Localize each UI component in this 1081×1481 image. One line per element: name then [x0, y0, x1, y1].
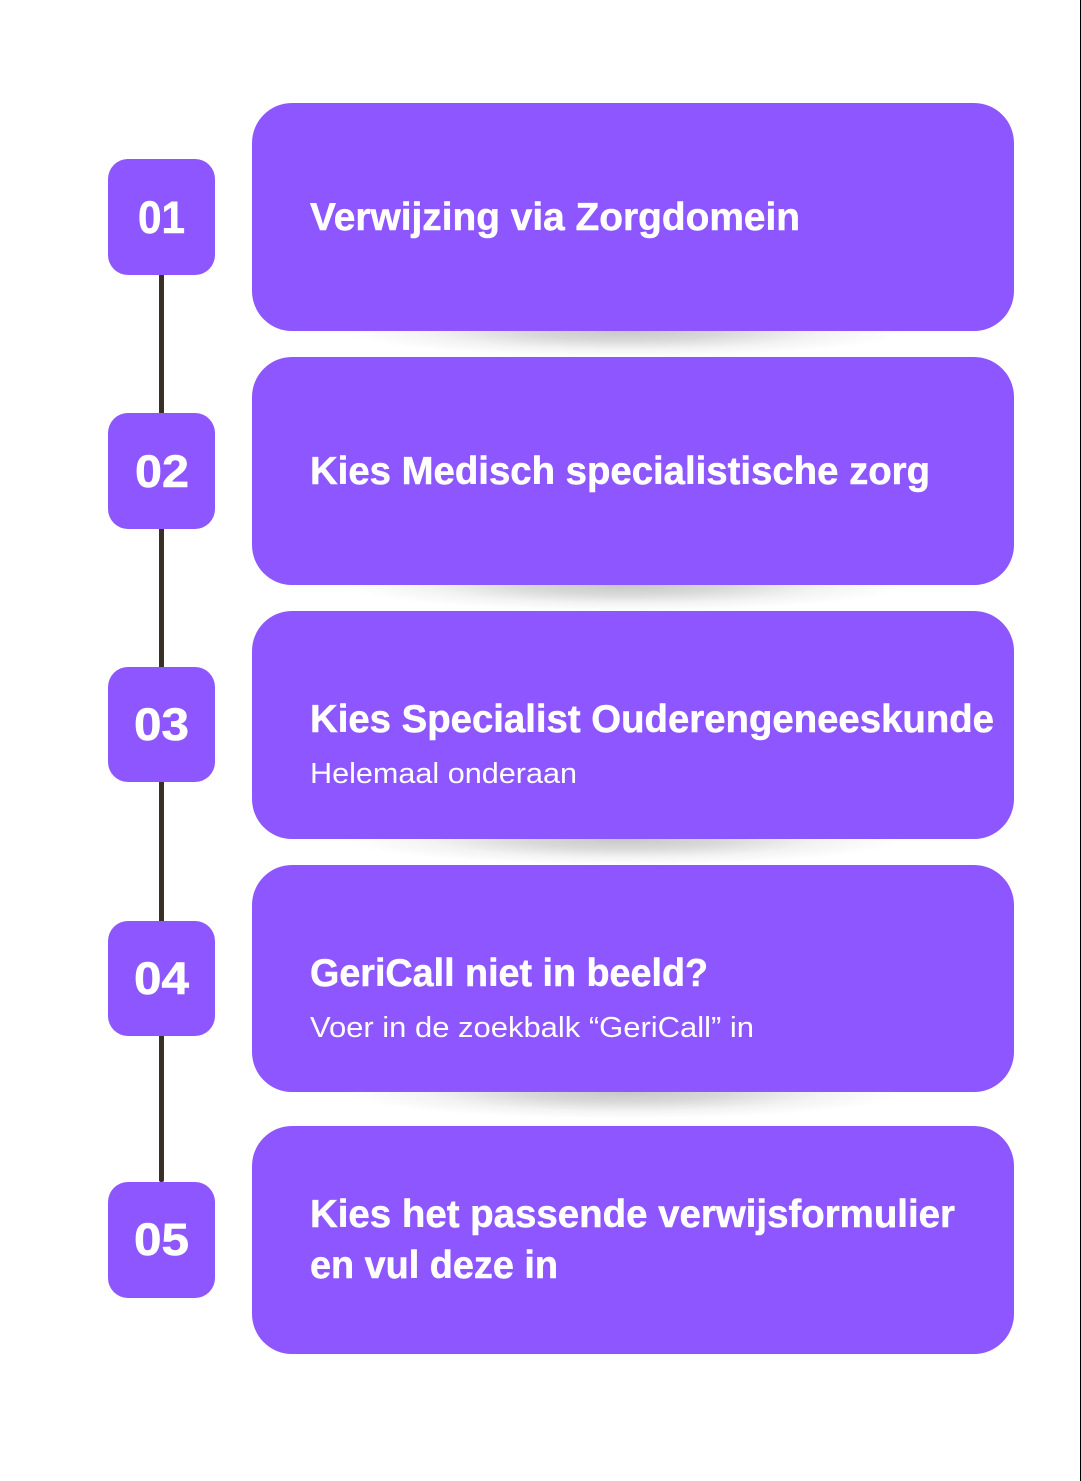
- panel: step 3: [252, 611, 1014, 839]
- step 2: [108, 357, 1014, 585]
- badge 05: 05: [134, 1214, 189, 1265]
- panel: step 1: Verwijzing via Zorgdomein: [310, 196, 800, 239]
- step 1: [108, 103, 1014, 331]
- panel: step 4: GeriCall niet in beeld?: [310, 952, 708, 995]
- badge 05: [108, 1182, 215, 1298]
- step 3: [108, 611, 1014, 839]
- badge 01: [108, 159, 215, 275]
- panel: step 3: Helemaal onderaan: [310, 758, 577, 790]
- panel: step 4: Voer in de zoekbalk “GeriCall” in: [310, 1012, 754, 1044]
- card shadows: [345, 305, 905, 1119]
- badge 02: [108, 413, 215, 529]
- step 5: [108, 1126, 1014, 1354]
- badge 04: 04: [134, 953, 189, 1004]
- step 4: [108, 865, 1014, 1092]
- panel: step 1: [252, 103, 1014, 331]
- badge 01: 01: [138, 192, 185, 243]
- panel: step 2: [252, 357, 1014, 585]
- badge 03: [108, 667, 215, 782]
- panel: step 3: Kies Specialist Ouderengeneeskunde: [310, 698, 994, 741]
- panel: step 5: en vul deze in: [310, 1244, 558, 1287]
- panel: step 5: [252, 1126, 1014, 1354]
- timeline connector line: [159, 270, 164, 1182]
- panel: step 4: [252, 865, 1014, 1092]
- panel: step 2: Kies Medisch specialistische zorg: [310, 450, 930, 493]
- badge 04: [108, 921, 215, 1036]
- panel: step 5: Kies het passende verwijsformulier: [310, 1193, 955, 1236]
- badge 03: 03: [134, 699, 189, 750]
- badge 02: 02: [135, 446, 189, 497]
